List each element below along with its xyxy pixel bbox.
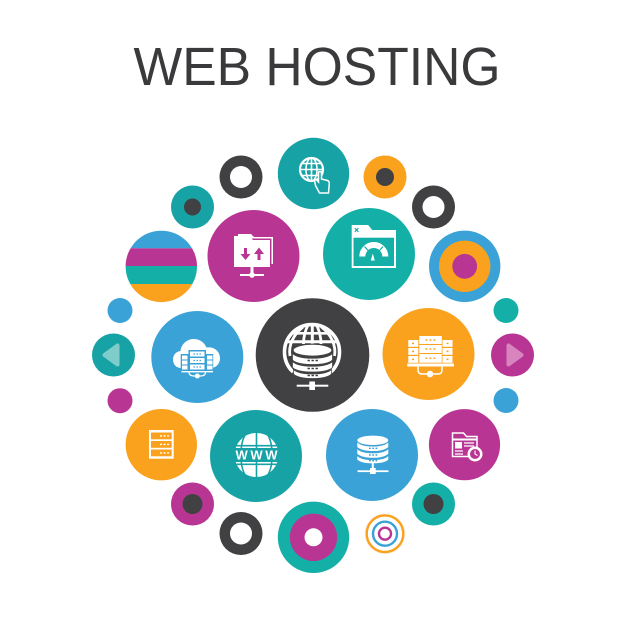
small dots xyxy=(108,298,518,413)
database network circle xyxy=(326,409,418,501)
right arrow button xyxy=(491,334,534,376)
dark ring top left xyxy=(220,156,262,198)
icon: database network xyxy=(357,436,388,474)
website clock circle xyxy=(429,409,500,480)
left arrow button xyxy=(92,334,135,376)
globe hand circle xyxy=(278,138,349,209)
cloud servers circle xyxy=(151,311,243,403)
icon: server rack network xyxy=(407,336,454,377)
teal dot bottom right xyxy=(412,482,455,526)
icon: www globe: WWW xyxy=(236,448,278,462)
folder transfer circle xyxy=(208,210,300,302)
teal target bottom xyxy=(278,502,349,573)
magenta dot bottom left xyxy=(171,482,214,526)
www globe circle xyxy=(210,410,302,502)
dark ring bottom xyxy=(220,512,262,555)
server network circle xyxy=(382,308,474,400)
orange dot top right xyxy=(364,156,406,198)
teal dot top left xyxy=(171,186,214,228)
small concentric target xyxy=(364,513,406,554)
icon: web page with clock xyxy=(452,433,482,462)
icon: globe with pointer xyxy=(300,158,329,193)
dark ring top right xyxy=(412,186,455,228)
central database globe circle xyxy=(256,298,369,412)
title: WEB HOSTING xyxy=(134,37,500,97)
icon: folder with arrows xyxy=(234,234,273,278)
icon: server rack xyxy=(149,430,174,459)
infographic xyxy=(92,47,534,573)
target circle right xyxy=(429,231,500,302)
icon: cloud servers xyxy=(173,339,220,378)
gauge window circle xyxy=(323,208,415,300)
icon: speed gauge window xyxy=(352,225,396,268)
server rack circle xyxy=(126,409,197,480)
striped circle xyxy=(125,230,198,303)
icon: globe with database xyxy=(284,324,339,390)
